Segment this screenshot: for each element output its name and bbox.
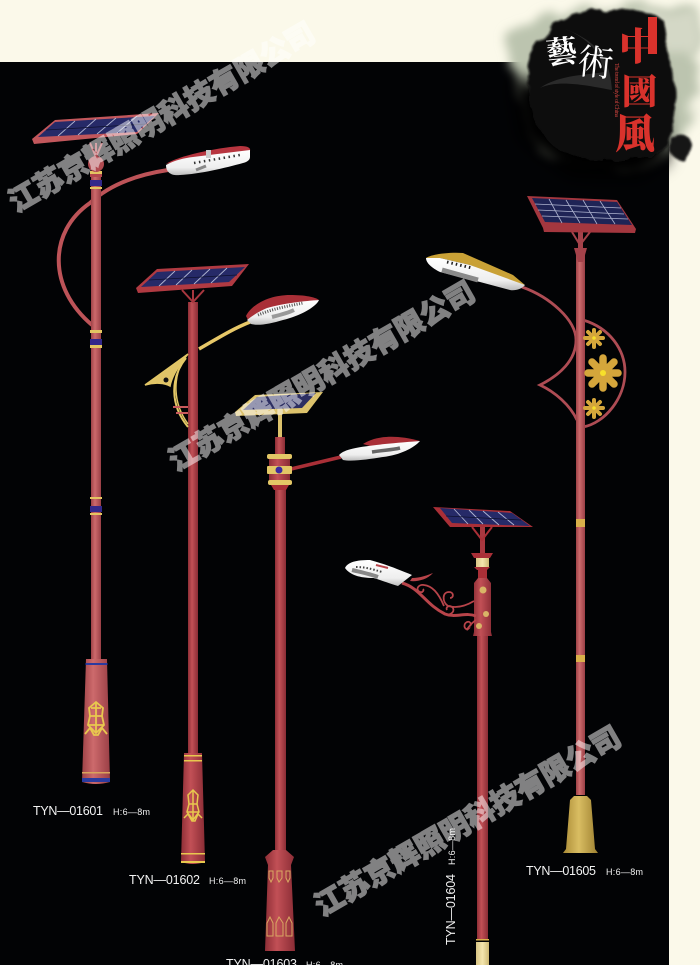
fork xyxy=(182,290,204,302)
lamp TYN-01601 xyxy=(32,113,250,784)
scroll bracket xyxy=(402,583,476,630)
model label TYN-01604: TYN—01604 xyxy=(444,874,458,945)
model label TYN-01605: TYN—01605 xyxy=(526,864,596,878)
red vertical title: 風 xyxy=(615,103,655,160)
upper flower xyxy=(585,330,603,347)
gold knot ornament xyxy=(184,790,202,821)
lamp TYN-01605 xyxy=(426,196,636,853)
solar panel xyxy=(527,196,636,233)
red vertical title: 中 xyxy=(619,16,657,71)
calligraphy title: art xyxy=(544,25,617,88)
model label TYN-01602 xyxy=(129,873,246,887)
watermark top: 江苏京辉照明科技有限公司 xyxy=(2,16,321,219)
gold stem xyxy=(278,414,282,444)
red vertical title xyxy=(615,16,657,160)
solar panel xyxy=(136,264,249,293)
model label TYN-01604: H:6—8m xyxy=(447,828,457,865)
gold knot ornament xyxy=(85,702,107,735)
gold bands xyxy=(576,519,585,662)
lamp head xyxy=(426,253,525,290)
ball finial xyxy=(88,156,104,172)
collar with jewel xyxy=(267,454,292,490)
lamp TYN-01604 xyxy=(345,507,533,965)
model label TYN-01604 xyxy=(444,828,458,945)
model label TYN-01601: H:6—8m xyxy=(113,807,150,817)
lamp head xyxy=(339,437,420,461)
yellow arm xyxy=(199,322,250,349)
large flower xyxy=(588,358,618,388)
arm xyxy=(291,457,341,469)
watermark middle: 江苏京辉照明科技有限公司 xyxy=(162,275,481,478)
model label TYN-01605: H:6—8m xyxy=(606,867,643,877)
arm xyxy=(522,287,577,420)
model label TYN-01601 xyxy=(33,804,150,818)
pole shaft xyxy=(91,172,101,662)
pole shaft xyxy=(275,485,286,855)
pole shaft xyxy=(576,255,585,795)
calligraphy title: art: 術 xyxy=(575,33,617,88)
decorative bands xyxy=(90,171,102,515)
tail xyxy=(410,573,433,581)
lamp head xyxy=(246,295,319,325)
decorated body xyxy=(473,578,492,636)
lamp head xyxy=(166,146,250,175)
pole shaft xyxy=(188,302,198,754)
model label TYN-01602: TYN—01602 xyxy=(129,873,200,887)
lamp TYN-01603 xyxy=(235,392,420,951)
arm xyxy=(59,170,168,325)
calligraphy title: art: 藝 xyxy=(544,25,579,73)
pole shaft xyxy=(477,635,488,940)
solar panel xyxy=(433,507,533,527)
gold ornament bracket xyxy=(145,354,188,427)
model label TYN-01603 xyxy=(226,957,343,965)
lamp head xyxy=(345,560,412,586)
half round frame xyxy=(583,320,625,427)
solar panel xyxy=(235,392,323,416)
lamp TYN-01602 xyxy=(136,264,319,864)
collar xyxy=(471,553,493,570)
ink wash title emblem xyxy=(505,4,700,965)
watermark bottom: 江苏京辉照明科技有限公司 xyxy=(308,720,627,923)
model label TYN-01602: H:6—8m xyxy=(209,876,246,886)
lower flower xyxy=(585,400,603,417)
model label TYN-01605 xyxy=(526,864,643,878)
model label TYN-01601: TYN—01601 xyxy=(33,804,103,818)
gold band and cream foot xyxy=(476,939,489,965)
small ink spot xyxy=(669,135,693,159)
base xyxy=(265,850,295,951)
red vertical title: 國 xyxy=(622,65,657,115)
small english title: The trend of style of China xyxy=(613,63,620,117)
gold base xyxy=(563,796,598,853)
base xyxy=(181,753,205,864)
base xyxy=(82,659,110,784)
solar panel xyxy=(32,113,159,144)
